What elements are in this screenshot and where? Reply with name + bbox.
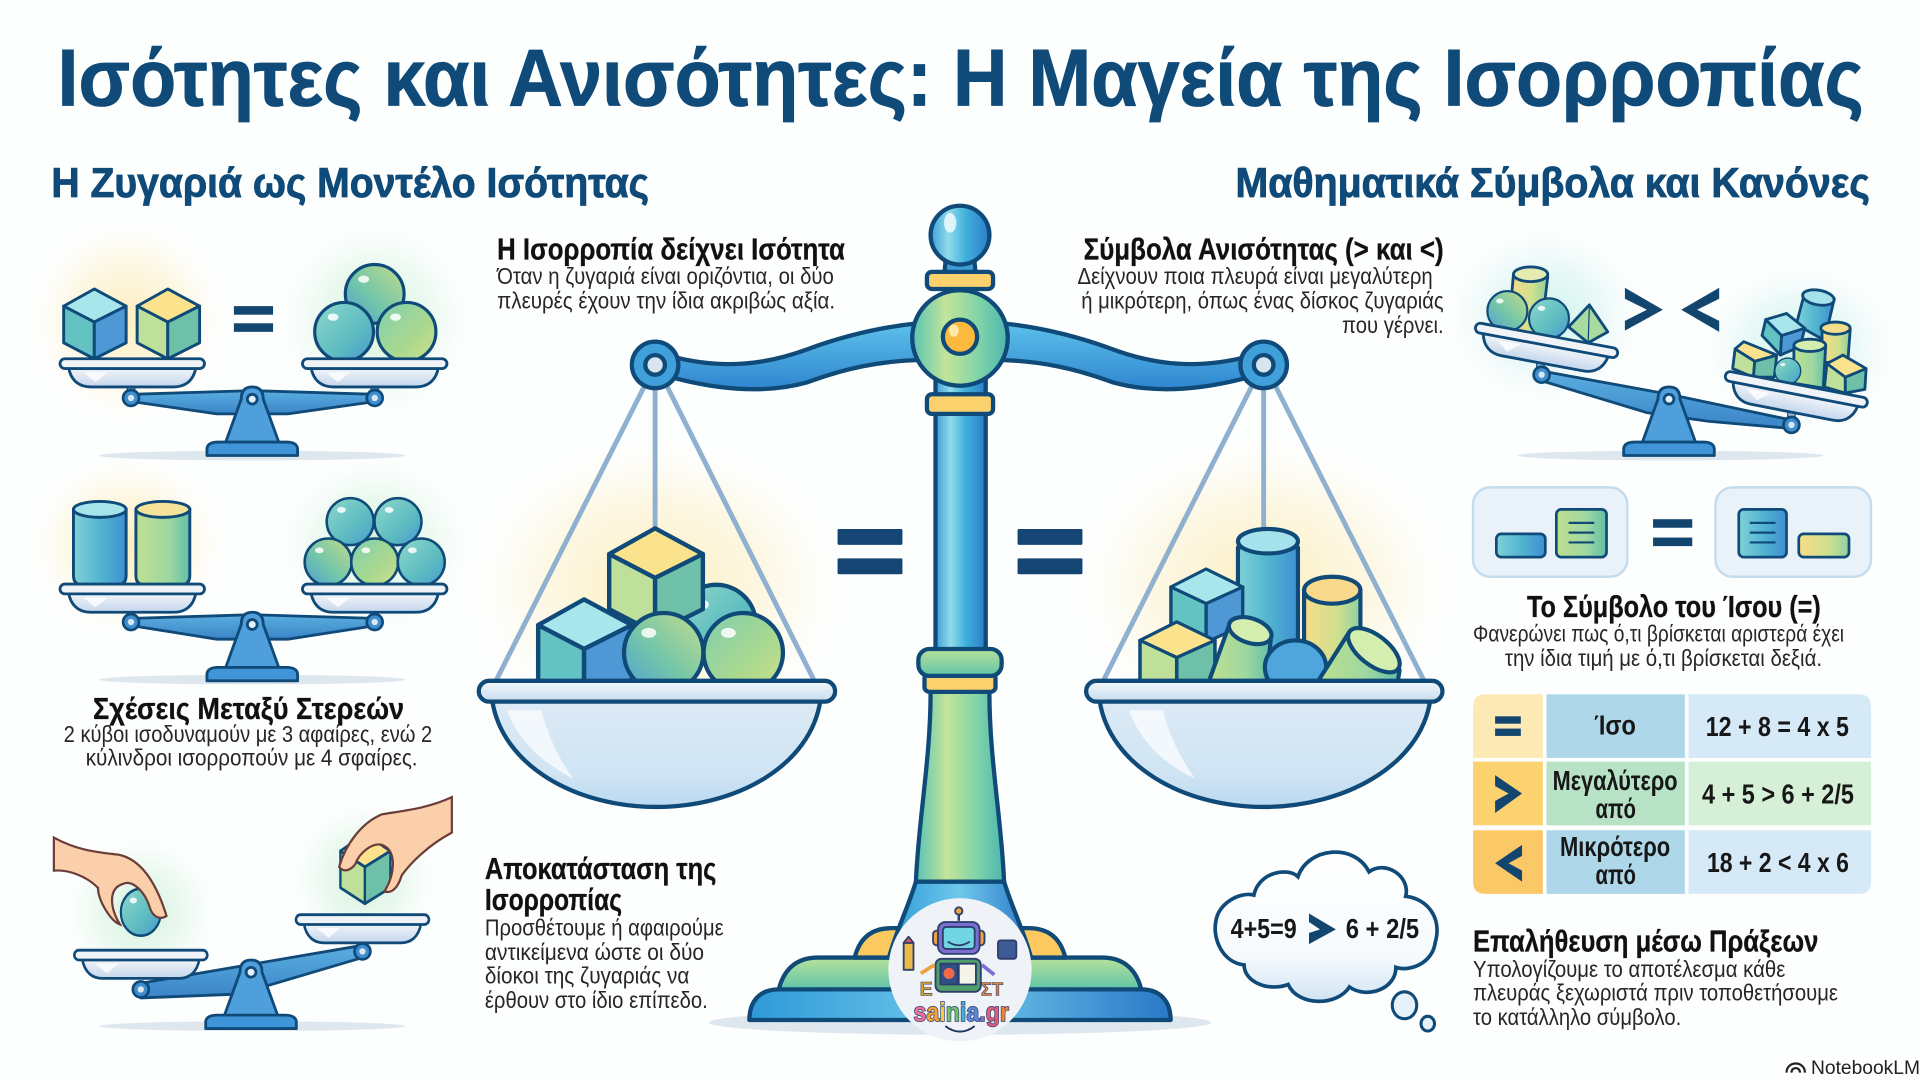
text block: restoring balance: έρθουν στο ίδιο επίπεδο. — [485, 987, 708, 1013]
right bowl — [1086, 681, 1442, 807]
logo: sainia.gr badge — [888, 898, 1032, 1041]
text block: balance shows equality: πλευρές έχουν την ίδια ακριβώς αξία. — [497, 288, 835, 314]
text block: restoring balance: Προσθέτουμε ή αφαιρούμε — [485, 915, 724, 941]
text block: relations between solids: κύλινδροι ισορροπούν με 4 σφαίρες. — [86, 744, 418, 770]
text block: equals symbol — [1473, 590, 1844, 671]
table labels: 18 + 2 < 4 x 6 — [1707, 847, 1849, 878]
panel: small balance with hands — [54, 797, 452, 1031]
NotebookLM mark: NotebookLM — [1811, 1057, 1920, 1079]
text block: restoring balance: Ισορροπίας — [485, 883, 622, 917]
panel: tilted balance with inequality symbols — [1447, 228, 1898, 460]
text block: relations between solids: 2 κύβοι ισοδυναμούν με 3 αφαίρες, ενώ 2 — [64, 721, 432, 747]
text block: balance shows equality: Η Ισορροπία δείχνει Ισότητα — [497, 233, 845, 267]
table symbols — [1495, 716, 1522, 882]
text block: restoring balance: Αποκατάσταση της — [485, 852, 716, 886]
text block: inequality symbols: Δείχνουν ποια πλευρά είναι μεγαλύτερη — [1078, 263, 1433, 289]
table labels: Μικρότερο — [1560, 831, 1670, 862]
pan strings — [495, 382, 1425, 683]
text block: restoring balance — [485, 852, 724, 1013]
thought bubble: 4+5=9 — [1231, 913, 1297, 944]
panel: small balance cubes and spheres — [32, 223, 470, 460]
heading: left section: Η Ζυγαριά ως Μοντέλο Ισότητας — [51, 159, 649, 206]
logo: sainia.gr badge: Ε — [920, 979, 933, 1001]
text block: balance shows equality — [496, 233, 845, 314]
table labels — [1553, 710, 1854, 890]
text block: equals symbol: την ίδια τιμή με ό,τι βρίσκεται δεξιά. — [1505, 645, 1822, 671]
panel: equals symbol cards — [1473, 487, 1871, 577]
equals signs beside the post — [838, 529, 1082, 574]
text block: inequality symbols: ή μικρότερη, όπως ένας δίσκος ζυγαριάς — [1081, 288, 1444, 314]
table labels: από — [1596, 859, 1636, 890]
text block: inequality symbols: Σύμβολα Ανισότητας (> και <) — [1084, 233, 1444, 267]
text block: inequality symbols: που γέρνει. — [1342, 312, 1444, 338]
logo: sainia.gr badge: sainia.gr — [913, 999, 1009, 1027]
beam — [632, 290, 1287, 389]
heading: right section: Μαθηματικά Σύμβολα και Κανόνες — [1236, 159, 1870, 206]
thought bubble: 6 + 2/5 — [1346, 913, 1419, 944]
table of symbols — [1473, 694, 1871, 894]
text block: relations between solids — [64, 692, 432, 770]
text block: verification: Επαλήθευση μέσω Πράξεων — [1473, 924, 1818, 958]
logo: sainia.gr badge: ΣΤ — [981, 979, 1004, 1000]
text block: inequality symbols — [1078, 233, 1444, 338]
left bowl — [479, 681, 835, 807]
table labels: Μεγαλύτερο — [1553, 765, 1678, 796]
text block: relations between solids: Σχέσεις Μεταξύ Στερεών — [93, 692, 404, 726]
thought bubble — [1215, 852, 1437, 1031]
right pan objects — [1140, 529, 1407, 697]
base — [749, 882, 1171, 1020]
post — [916, 206, 1004, 882]
text block: equals symbol: Φανερώνει πως ό,τι βρίσκεται αριστερά έχει — [1473, 621, 1844, 647]
main balance scale — [473, 206, 1447, 1035]
text block: equals symbol: Το Σύμβολο του Ίσου (=) — [1527, 590, 1821, 624]
table labels: Ίσο — [1594, 710, 1636, 741]
text block: restoring balance: αντικείμενα ώστε οι δύο — [485, 939, 704, 965]
text block: balance shows equality: Όταν η ζυγαριά είναι οριζόντια, οι δύο — [496, 263, 834, 289]
left pan objects — [538, 528, 783, 704]
text block: restoring balance: δίοκοι της ζυγαριάς να — [485, 962, 689, 988]
table labels: 12 + 8 = 4 x 5 — [1706, 711, 1849, 742]
table labels: 4 + 5 > 6 + 2/5 — [1702, 778, 1854, 809]
panel: small balance cylinders and spheres — [32, 458, 470, 684]
text block: verification: πλευράς ξεχωριστά πριν τοποθετήσουμε — [1473, 979, 1838, 1005]
text block: verification: το κατάλληλο σύμβολο. — [1473, 1004, 1681, 1030]
table labels: από — [1596, 793, 1636, 824]
text block: verification — [1473, 924, 1838, 1030]
text block: verification: Υπολογίζουμε το αποτέλεσμα κάθε — [1473, 956, 1785, 982]
